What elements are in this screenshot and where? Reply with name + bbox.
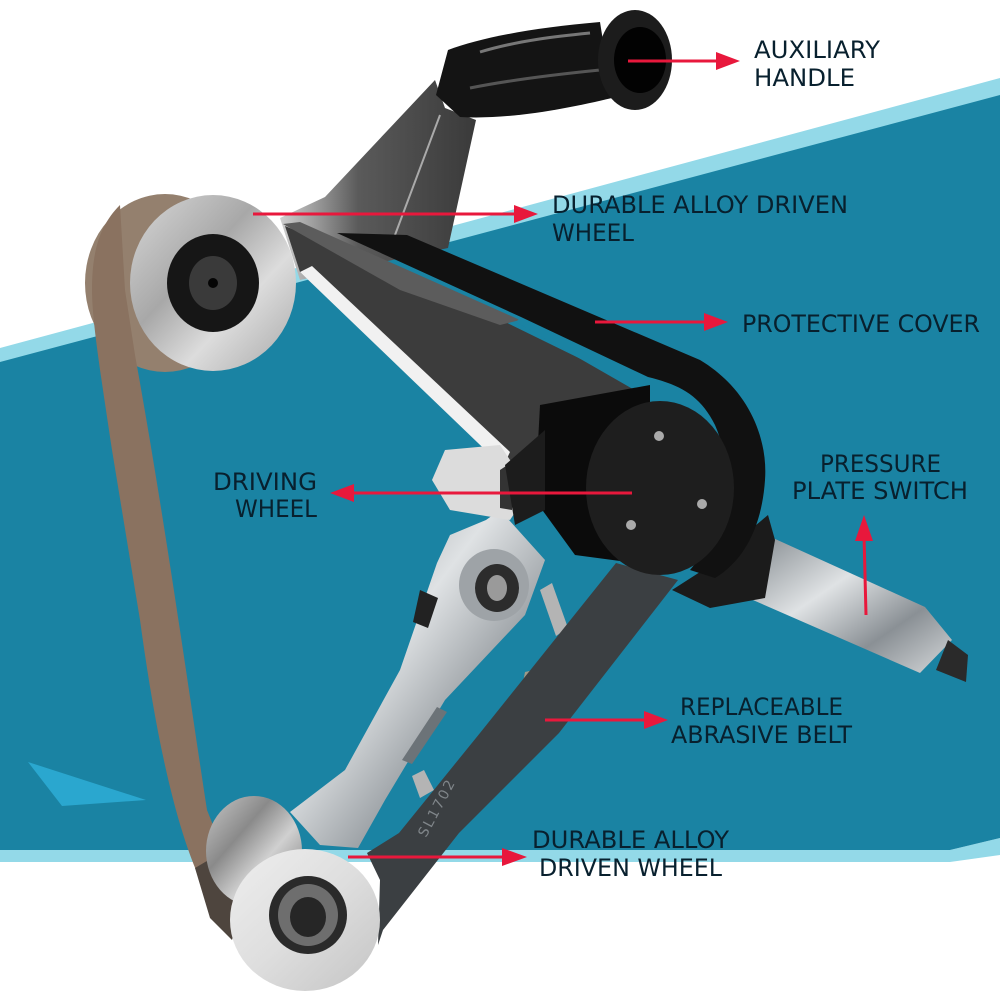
arrow: bottom driven wheel: [348, 848, 527, 866]
arrow: top driven wheel: [253, 205, 538, 223]
label: pressure plate switch: PRESSURE: [820, 450, 941, 478]
label: pressure plate switch: [792, 450, 968, 505]
dark belt end: [195, 858, 240, 940]
bottom roller: [206, 796, 302, 906]
label: replaceable abrasive belt: ABRASIVE BELT: [671, 721, 852, 749]
replaceable abrasive belt: SL1702: [415, 778, 459, 840]
label: pressure plate switch: PLATE SWITCH: [792, 477, 968, 505]
arrow: auxiliary handle: [628, 52, 740, 70]
label: durable alloy driven wheel bottom: DURABLE ALLOY: [532, 826, 729, 854]
label: durable alloy driven wheel bottom: DRIVEN WHEEL: [539, 854, 723, 882]
label: durable alloy driven wheel top: [552, 191, 848, 247]
brown sanding belt: [92, 205, 240, 938]
driving wheel gear: [432, 445, 530, 520]
rear grip body: [672, 515, 968, 682]
bottom driven wheel: [230, 849, 380, 991]
background: light blue band: [0, 78, 1000, 862]
protective cover: [337, 233, 765, 578]
arrow: driving wheel: [330, 484, 632, 502]
label: protective cover: PROTECTIVE COVER: [742, 310, 980, 338]
label: durable alloy driven wheel top: DURABLE ALLOY DRIVEN: [552, 191, 848, 219]
background: teal panel: [0, 95, 1000, 850]
label: replaceable abrasive belt: [671, 693, 852, 749]
label: driving wheel: [213, 468, 318, 523]
label: durable alloy driven wheel bottom: [532, 826, 729, 882]
arrow: pressure plate switch: [855, 515, 873, 615]
motor housing: [505, 385, 650, 565]
lower alloy arm: [290, 510, 545, 848]
label: durable alloy driven wheel top: WHEEL: [552, 219, 635, 247]
replaceable abrasive belt: [367, 563, 678, 945]
label: auxiliary handle: AUXILIARY: [754, 36, 880, 64]
small screws and spring: [412, 583, 568, 798]
arrow: abrasive belt: [545, 711, 668, 729]
driving wheel cover disc: [586, 401, 734, 575]
label: auxiliary handle: [754, 36, 880, 92]
brown belt wheel behind: [85, 194, 245, 372]
label: driving wheel: DRIVING: [213, 468, 317, 496]
label: driving wheel: WHEEL: [235, 495, 318, 523]
arrow: protective cover: [595, 313, 728, 331]
top driven wheel: [130, 195, 296, 371]
upper handle arm: [280, 80, 476, 280]
pivot joint: [459, 549, 529, 621]
icon: decorative blue triangle: [28, 762, 146, 806]
label: replaceable abrasive belt: REPLACEABLE: [680, 693, 843, 721]
auxiliary handle grip: [436, 10, 672, 117]
internal arm housing: [283, 222, 648, 500]
label: auxiliary handle: HANDLE: [754, 64, 855, 92]
